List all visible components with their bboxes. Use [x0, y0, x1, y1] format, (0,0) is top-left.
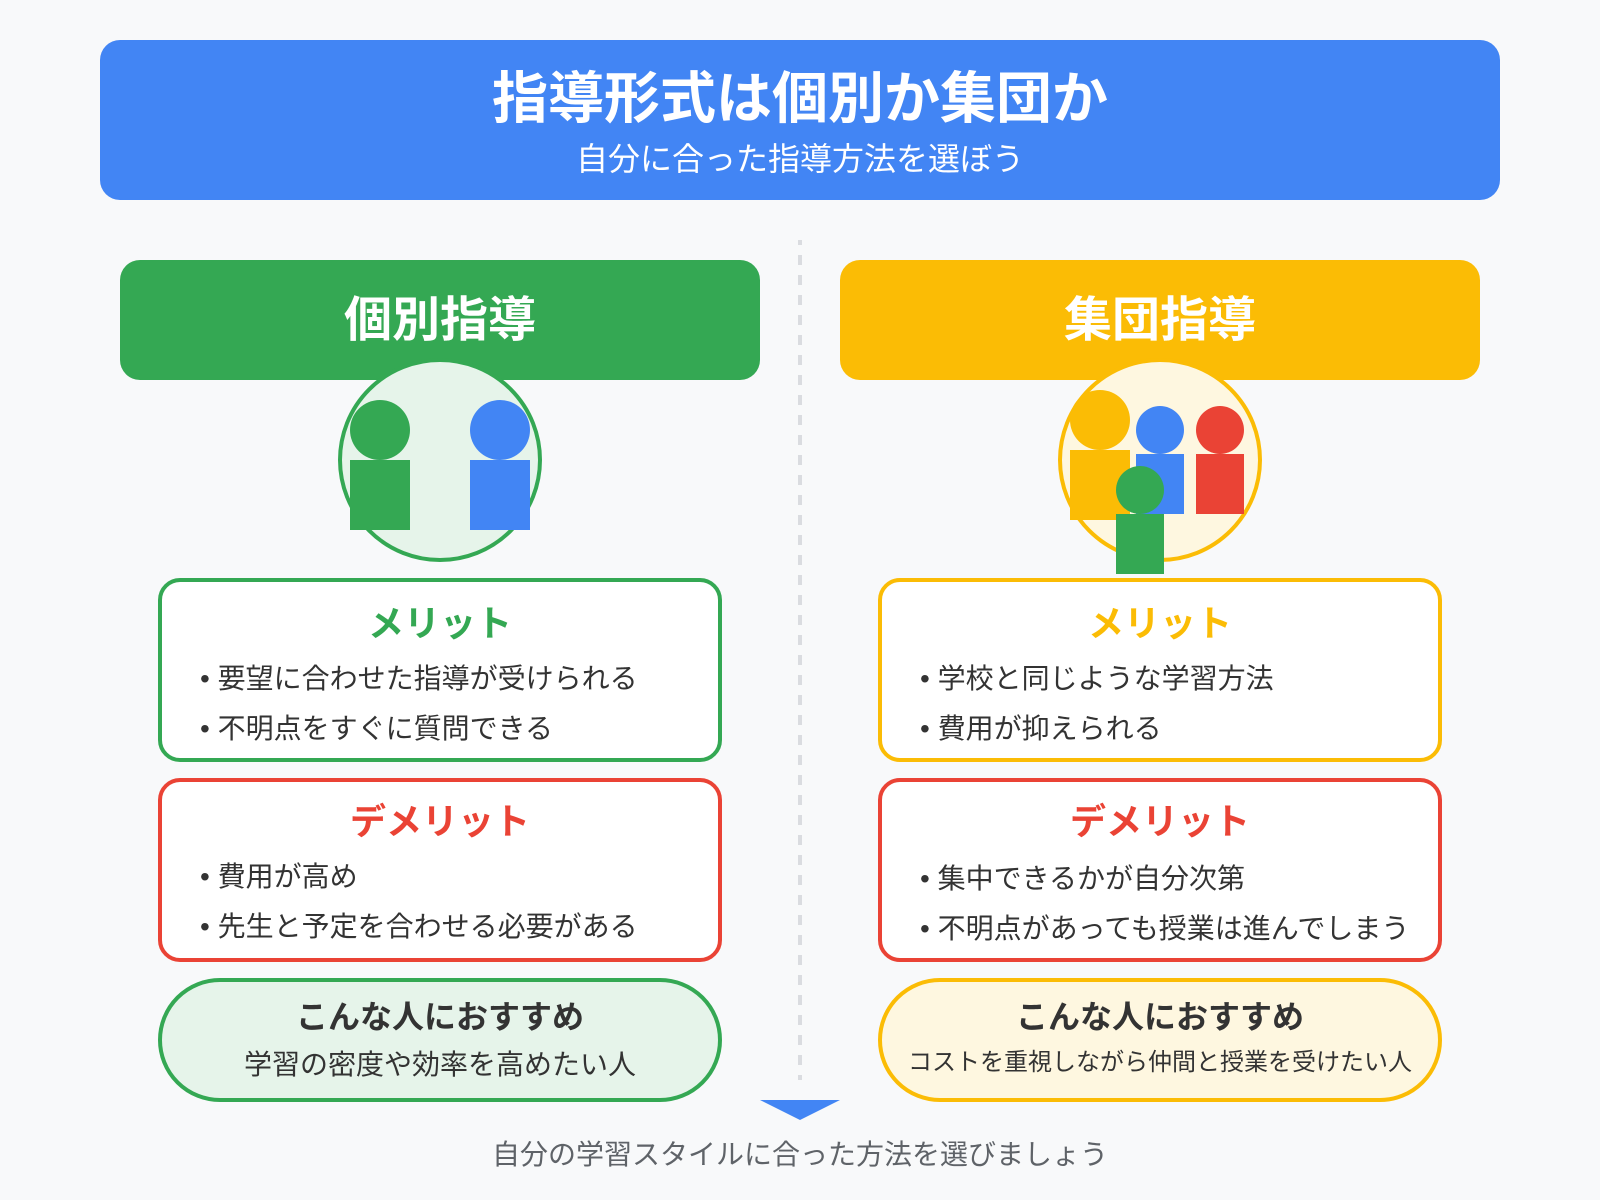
demerits box: • 不明点があっても授業は進んでしまう: [920, 913, 1409, 944]
recommendation box: [880, 980, 1440, 1100]
merits box: • 費用が抑えられる: [920, 713, 1162, 744]
demerits box: • 集中できるかが自分次第: [920, 863, 1245, 894]
subtitle: 自分に合った指導方法を選ぼう: [576, 141, 1024, 177]
merits box: [880, 580, 1440, 760]
merits box: [160, 580, 720, 760]
demerits box: [880, 780, 1440, 960]
recommendation box: こんな人におすすめ: [296, 999, 584, 1035]
recommendation box: こんな人におすすめ: [1016, 999, 1304, 1035]
merits box: メリット: [368, 603, 512, 644]
icon: two people: [340, 360, 540, 560]
merits box: • 不明点をすぐに質問できる: [200, 713, 553, 744]
arrow: down: [760, 1100, 840, 1120]
merits box: • 学校と同じような学習方法: [920, 663, 1274, 694]
heading: individual tutoring: [120, 260, 760, 380]
recommendation box: 学習の密度や効率を高めたい人: [244, 1049, 636, 1080]
heading: group tutoring: 集団指導: [1064, 294, 1256, 347]
demerits box: デメリット: [350, 801, 530, 842]
demerits box: • 費用が高め: [200, 861, 358, 892]
heading: group tutoring: [840, 260, 1480, 380]
recommendation box: [160, 980, 720, 1100]
title: 指導形式は個別か集団か: [492, 67, 1108, 130]
heading: individual tutoring: 個別指導: [344, 294, 536, 347]
recommendation box: コストを重視しながら仲間と授業を受けたい人: [908, 1049, 1412, 1076]
panel: individual tutoring: [120, 260, 760, 1100]
demerits box: デメリット: [1070, 801, 1250, 842]
header banner: [100, 40, 1500, 200]
demerits box: [160, 780, 720, 960]
panel: group tutoring: [840, 260, 1480, 1100]
merits box: • 要望に合わせた指導が受けられる: [200, 663, 638, 694]
demerits box: • 先生と予定を合わせる必要がある: [200, 911, 638, 942]
merits box: メリット: [1088, 603, 1232, 644]
icon: group of people: [1060, 360, 1260, 574]
footer message: 自分の学習スタイルに合った方法を選びましょう: [492, 1139, 1108, 1170]
